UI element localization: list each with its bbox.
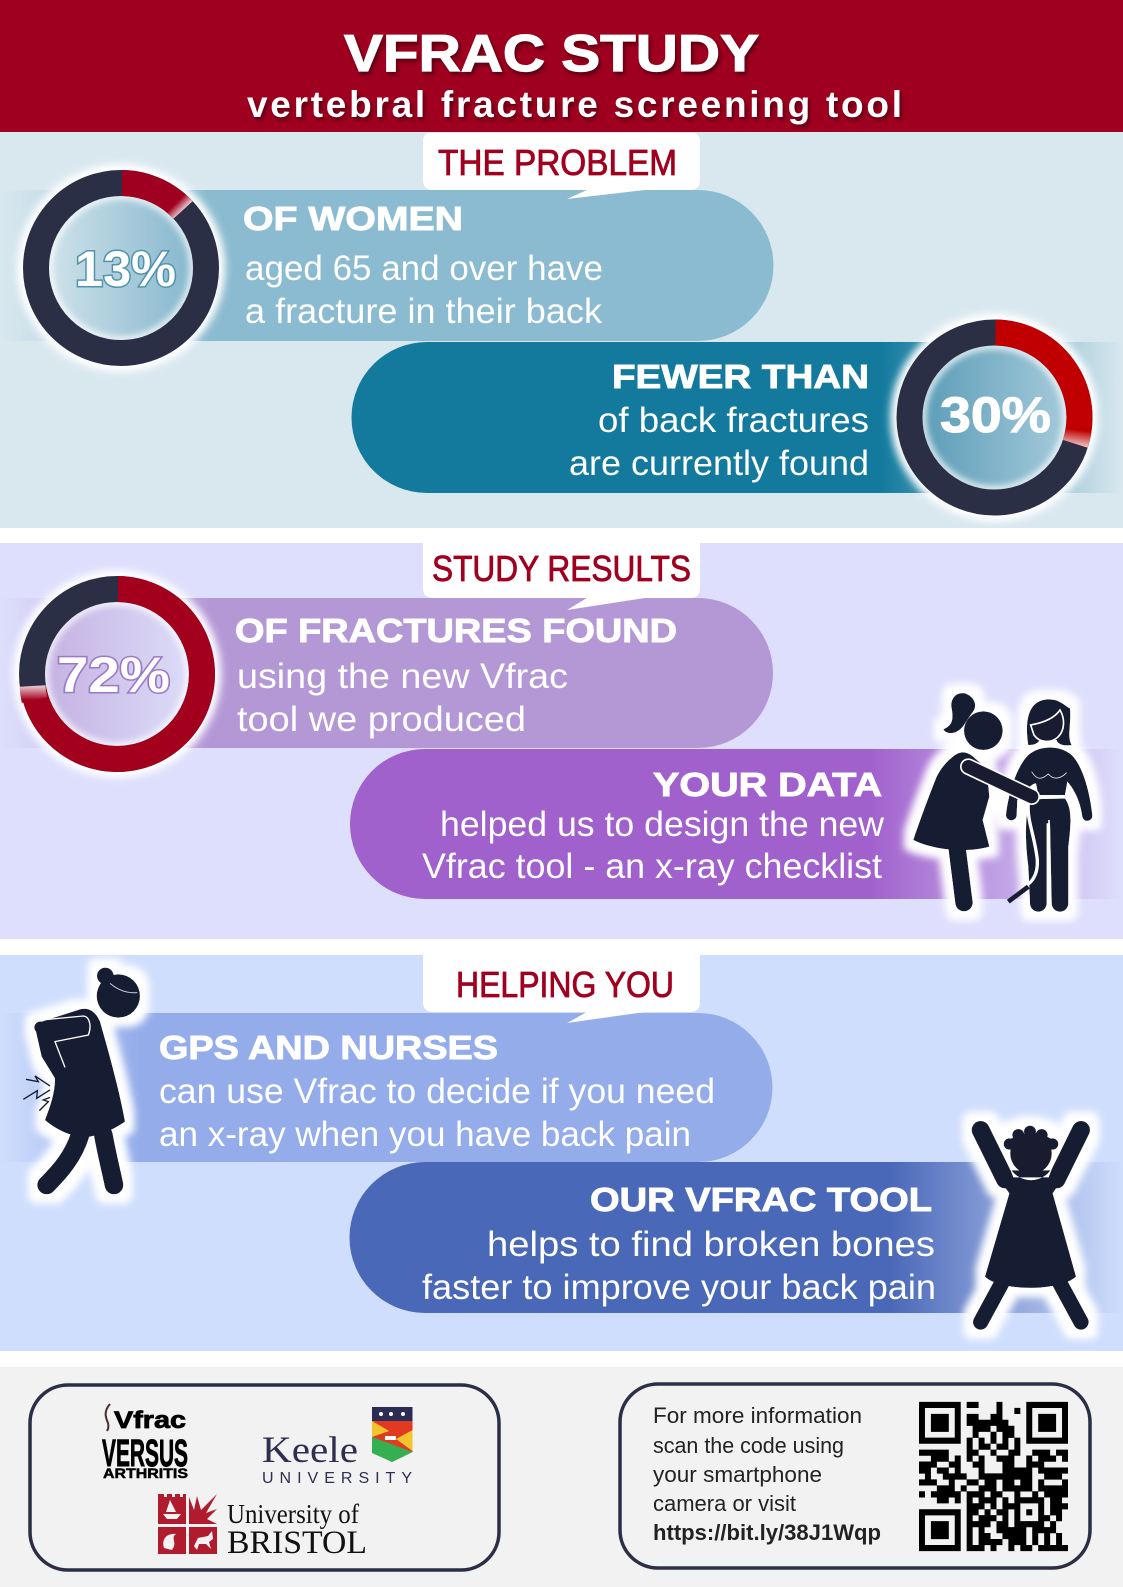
speech bubble heading: helping you: HELPING YOU: [456, 964, 674, 1005]
text: our vfrac tool: [422, 1181, 936, 1307]
text: of women: [243, 200, 603, 331]
logo: Keele University: UNIVERSITY: [262, 1470, 412, 1487]
text: of fractures found: OF FRACTURES FOUND: [235, 612, 677, 649]
speech bubble heading: study results: STUDY RESULTS: [432, 548, 691, 589]
panel: study results: [0, 543, 1123, 939]
logo: University of Bristol: [158, 1494, 367, 1561]
shield: [372, 1407, 412, 1462]
text: fewer than: FEWER THAN: [612, 358, 869, 395]
text: our vfrac tool: helps to find broken bones: [487, 1225, 935, 1264]
text: gps and nurses: an x-ray when you have back pain: [159, 1115, 691, 1154]
text: of fractures found: [235, 612, 677, 739]
donut: 72%: [13, 570, 221, 778]
crest: [158, 1494, 217, 1554]
text: fewer than: of back fractures: [598, 401, 869, 440]
text: your data: Vfrac tool - an x-ray checklist: [422, 847, 882, 886]
donut: 13%: 13%: [75, 241, 176, 297]
text: your data: [422, 766, 885, 886]
text: of fractures found: tool we produced: [237, 700, 526, 739]
logo: Vfrac: Vfrac: [114, 1407, 186, 1434]
pill: your data: [350, 749, 1123, 899]
text: of women: OF WOMEN: [243, 200, 463, 237]
text: of fractures found: using the new Vfrac: [237, 657, 568, 696]
icon: two women measuring: [913, 693, 1092, 912]
info box: [620, 1384, 1090, 1568]
donut: 72%: 72%: [57, 647, 170, 703]
logo: Versus Arthritis: VERSUS: [102, 1433, 188, 1475]
QR code: [919, 1405, 1068, 1548]
info text: scan the code using: [653, 1433, 844, 1458]
logo: University of Bristol: BRISTOL: [227, 1525, 367, 1561]
text: gps and nurses: can use Vfrac to decide if you need: [159, 1072, 715, 1111]
text: fewer than: are currently found: [569, 444, 869, 483]
pill: gps and nurses: [0, 1013, 772, 1162]
speech bubble heading: the problem: THE PROBLEM: [438, 142, 677, 183]
panel: helping you: [0, 955, 1123, 1351]
logo: Keele University: Keele: [262, 1430, 358, 1471]
panel: the problem: [0, 132, 1123, 528]
icon: woman with back pain: [23, 968, 140, 1185]
text: gps and nurses: [159, 1029, 715, 1154]
donut: 30%: 30%: [940, 387, 1051, 443]
text: your data: YOUR DATA: [653, 766, 882, 803]
header banner: [0, 0, 1123, 132]
pill: of fractures found: [0, 598, 773, 748]
panel: footer: [0, 1367, 1123, 1587]
donut: 13%: [17, 164, 225, 372]
logo: University of Bristol: University of: [227, 1499, 359, 1529]
speech bubble heading: helping you: [423, 955, 700, 1023]
text: our vfrac tool: OUR VFRAC TOOL: [590, 1181, 932, 1218]
logo: Keele University: [262, 1407, 412, 1487]
pill: fewer than: [352, 342, 1123, 493]
pill: of women: [0, 190, 774, 341]
info text: camera or visit: [653, 1491, 796, 1516]
speech bubble heading: study results: [423, 543, 700, 610]
logos box: [30, 1385, 499, 1570]
donut: 30%: [890, 314, 1098, 522]
text: gps and nurses: GPS AND NURSES: [159, 1029, 498, 1066]
speech bubble heading: the problem: [423, 133, 700, 199]
icon: cheering woman: [981, 1126, 1081, 1322]
info text: For more information: [653, 1403, 862, 1428]
title: VFRAC STUDY: [344, 25, 759, 83]
logo: Versus Arthritis: [102, 1433, 188, 1481]
text: of women: a fracture in their back: [245, 292, 603, 331]
pill: our vfrac tool: [350, 1162, 1123, 1313]
text: your data: helped us to design the new: [440, 805, 885, 844]
text: of women: aged 65 and over have: [245, 249, 603, 288]
info text: https://bit.ly/38J1Wqp: [653, 1520, 881, 1545]
subtitle: vertebral fracture screening tool: [247, 84, 902, 125]
logo: Vfrac: [106, 1404, 186, 1434]
text: fewer than: [569, 358, 869, 483]
logo: Versus Arthritis: ARTHRITIS: [103, 1465, 188, 1481]
text: our vfrac tool: faster to improve your back pain: [422, 1268, 936, 1307]
info text: [653, 1403, 881, 1545]
info text: your smartphone: [653, 1462, 822, 1487]
